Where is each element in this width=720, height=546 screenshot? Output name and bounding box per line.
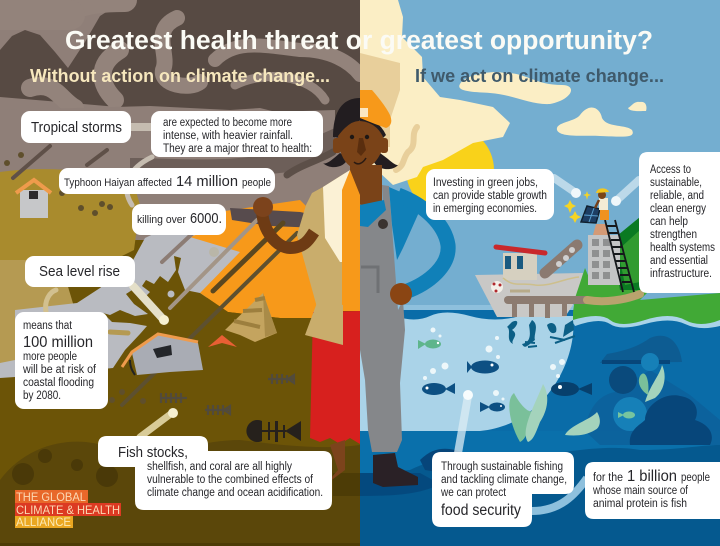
callout: access to clean energy: Access to — [650, 164, 691, 176]
callout: access to clean energy: sustainable, — [650, 177, 702, 189]
icon: large cloud — [360, 0, 510, 185]
callout: killing over 6000 — [132, 204, 226, 235]
icon: kelp pieces under dock — [507, 320, 575, 347]
logo: the global climate and health alliance: ALLIANCE — [16, 515, 71, 529]
callout: 100 million at risk: means that — [23, 320, 73, 332]
icon: cloud middle — [557, 108, 633, 137]
right arm and blue shirt — [360, 187, 448, 305]
callout: access to clean energy: clean energy — [650, 203, 706, 215]
shawl and skirt — [297, 170, 360, 485]
icon: deep water shapes — [584, 336, 720, 445]
callout: green jobs: in emerging economies. — [433, 203, 537, 215]
icon: wrecked tent — [225, 293, 277, 342]
callout: expected to become more intense — [151, 111, 323, 157]
icon: left storm lines — [13, 146, 297, 405]
callout: fish stocks: Fish stocks, — [118, 444, 188, 461]
hair and head — [323, 98, 398, 205]
callout: fish stocks: shellfish, and coral are all highly — [147, 461, 292, 473]
callout: access to clean energy: infrastructure. — [650, 268, 712, 280]
callout: access to clean energy: can help — [650, 216, 688, 228]
heading: if we act: If we act on climate change... — [415, 65, 664, 86]
callout: sea level rise — [25, 256, 135, 287]
icon: cloud small — [628, 102, 646, 111]
callout: typhoon haiyan: Typhoon Haiyan affected — [64, 177, 172, 189]
figure: woman — [253, 90, 448, 487]
callout: expected to become more intense: They are a major threat to health: — [163, 143, 312, 155]
callout: typhoon haiyan — [59, 168, 275, 194]
callout: green jobs: Investing in green jobs, — [433, 177, 538, 189]
pointer lines right — [458, 178, 639, 453]
callout: food security — [432, 452, 574, 527]
logo: the global climate and health alliance — [15, 490, 121, 529]
icon: red roof — [208, 335, 237, 347]
callout: 1 billion people — [585, 462, 720, 519]
callout: food security: and tackling climate change, — [441, 474, 567, 486]
icon: fish skeletons — [161, 374, 294, 415]
icon: cloud upper — [459, 72, 571, 104]
panel: if we act background — [360, 0, 720, 546]
callout: 1 billion people: whose main source of — [592, 485, 689, 497]
callout: killing over 6000: 6000. — [190, 210, 222, 227]
icon: dock — [508, 294, 640, 318]
icon: large fish skeleton — [246, 420, 301, 442]
icon: building — [588, 224, 620, 285]
callout: green jobs — [426, 169, 554, 220]
callout: 100 million at risk: will be at risk of — [22, 364, 97, 376]
callout: tropical storms: Tropical storms — [31, 119, 122, 136]
icon: bubbles — [423, 328, 565, 400]
icon: ship — [475, 245, 583, 317]
callout: fish stocks: climate change and ocean acidification. — [147, 487, 323, 499]
pointer lines left — [46, 127, 178, 437]
callout: expected to become more intense: intense, with heavier rainfall. — [163, 130, 293, 142]
callout: access to clean energy: and essential — [650, 255, 708, 267]
callout: access to clean energy: strengthen — [650, 229, 697, 241]
callout: 100 million at risk — [15, 312, 108, 409]
callout: fish stocks — [98, 436, 332, 510]
panel: without action background — [0, 0, 360, 546]
callout: 100 million at risk: coastal flooding — [23, 377, 94, 389]
callout: 1 billion people: 1 billion — [627, 468, 677, 485]
overalls — [360, 185, 405, 452]
callout: food security: food security — [441, 502, 521, 519]
icon: fish — [418, 340, 635, 418]
icon: submerged house — [122, 334, 203, 375]
callout: food security: we can protect — [440, 487, 507, 499]
callout: fish stocks: vulnerable to the combined effects of — [147, 474, 314, 486]
callout: killing over 6000: killing over — [137, 214, 186, 226]
boot — [373, 453, 418, 487]
title: Greatest health threat or greatest opportunity? — [65, 27, 653, 55]
callout: green jobs: can provide stable growth — [433, 190, 547, 202]
callout: 100 million at risk: more people — [23, 351, 77, 363]
logo: the global climate and health alliance: THE GLOBAL — [16, 490, 86, 504]
callout: 1 billion people: people — [681, 472, 710, 484]
callout: access to clean energy — [639, 152, 720, 293]
callout: access to clean energy: reliable, and — [650, 190, 704, 202]
icon: worker with solar panel — [581, 188, 609, 223]
logo: the global climate and health alliance: CLIMATE & HEALTH — [16, 503, 120, 517]
icon: seabed blobs left — [12, 449, 118, 487]
helmet — [360, 90, 391, 128]
icon: house — [16, 180, 51, 218]
icon: island — [573, 217, 720, 324]
icon: ladder — [605, 220, 634, 292]
callout: 100 million at risk: 100 million — [23, 334, 93, 351]
callout: food security: Through sustainable fishing — [441, 461, 563, 473]
icon: sparkles — [564, 191, 591, 223]
callout: typhoon haiyan: 14 million — [176, 173, 238, 190]
icon: scattered debris dots — [4, 152, 146, 404]
callout: 1 billion people: animal protein is fish — [593, 498, 687, 510]
connector: food security to 1 billion — [532, 478, 587, 511]
heading: without action: Without action on climate change... — [30, 65, 330, 86]
callout: expected to become more intense: are expected to become more — [163, 117, 292, 129]
callout: sea level rise: Sea level rise — [39, 264, 120, 280]
callout: tropical storms — [21, 111, 131, 143]
left arm — [253, 197, 314, 248]
icon: seaweed — [509, 365, 665, 442]
callout: 1 billion people: for the — [593, 472, 623, 484]
callout: 100 million at risk: by 2080. — [23, 390, 61, 402]
callout: typhoon haiyan: people — [242, 177, 271, 189]
icon: sun — [406, 126, 494, 214]
